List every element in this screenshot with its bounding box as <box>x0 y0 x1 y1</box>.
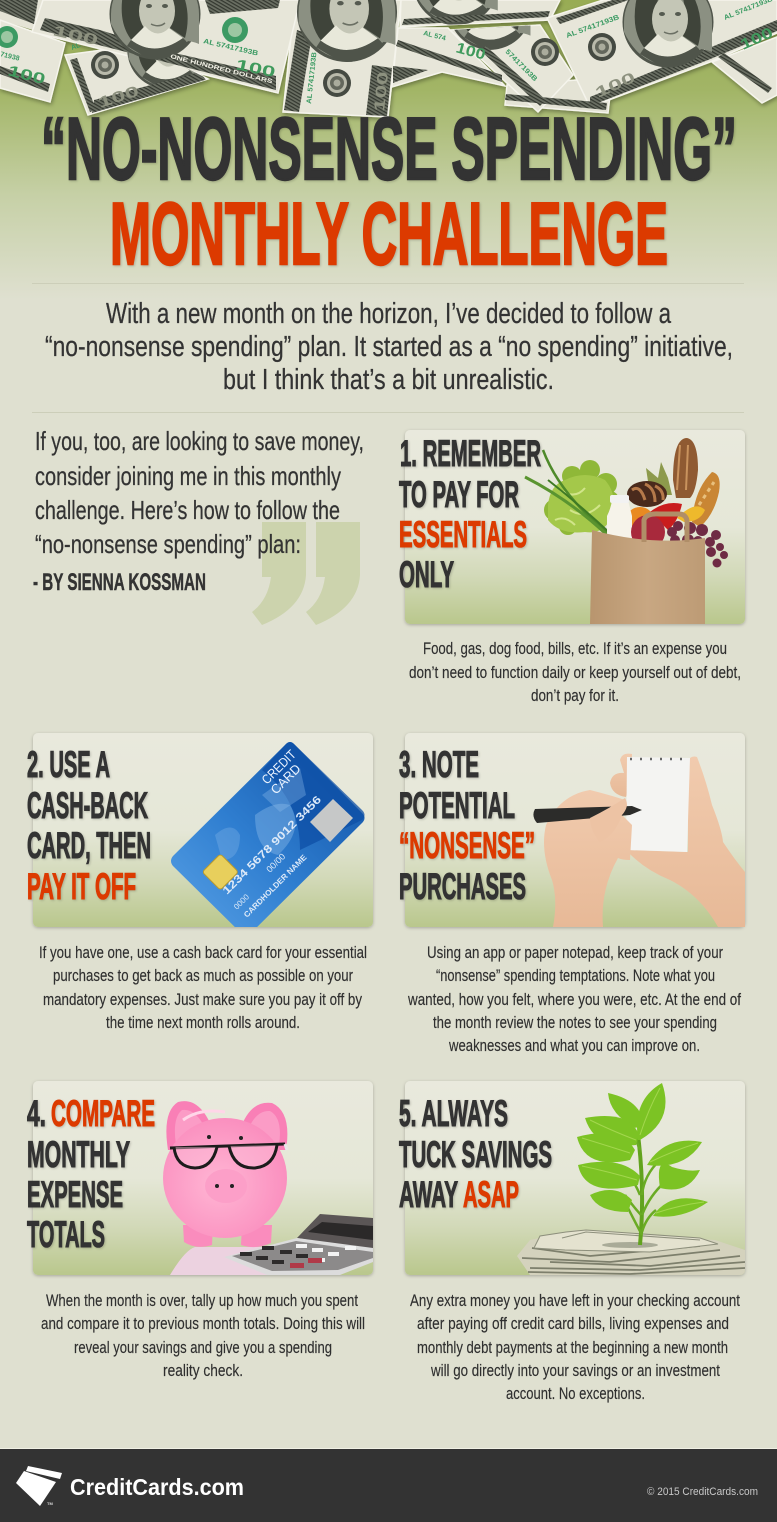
panel 5 heading: AWAY <box>399 1174 458 1215</box>
bill serial and denomination text: 57417193B <box>504 48 538 83</box>
panel 3 description: weaknesses and what you can improve on. <box>448 1036 700 1055</box>
panel 4 heading: EXPENSE <box>27 1174 123 1215</box>
icon: credit card: 1234 5678 9012 3456 <box>221 794 324 897</box>
panel 1 heading: 1. REMEMBER <box>400 433 541 474</box>
logo: CreditCards.com: CreditCards.com <box>70 1474 244 1500</box>
panel 3 heading: POTENTIAL <box>399 785 515 826</box>
panel 2 heading: CARD, THEN <box>27 825 151 866</box>
engraved bands and portraits <box>0 0 777 116</box>
panel 4 description <box>41 1291 365 1380</box>
panel 5 description: account. No exceptions. <box>506 1384 645 1403</box>
panel 2 description: purchases to get back as much as possible on your <box>53 966 353 985</box>
panel 3 description <box>407 943 741 1055</box>
title <box>41 99 737 283</box>
intro paragraph <box>45 298 733 396</box>
bill serial and denomination text <box>0 0 776 112</box>
quote text: “no-nonsense spending” plan: <box>35 529 301 559</box>
icon: plant growing from money <box>517 1083 745 1275</box>
quote text: If you, too, are looking to save money, <box>35 426 364 456</box>
bill serial and denomination text: 100 <box>738 24 776 54</box>
bill serial and denomination text: AL <box>70 42 82 52</box>
panel 2 heading <box>27 744 151 907</box>
icon: credit card <box>171 742 364 938</box>
panel 2 heading: 2. USE A <box>27 744 110 785</box>
panel 4 description: When the month is over, tally up how much you spent <box>46 1291 358 1310</box>
icon: large quotation mark <box>252 522 360 625</box>
icon: hand writing on notepad <box>533 754 745 927</box>
panel 2 description: mandatory expenses. Just make sure you pay it off by <box>43 990 362 1009</box>
bill serial and denomination text: AL 574 <box>423 30 446 42</box>
panel 1 heading: ONLY <box>399 554 454 595</box>
panel 1: essentials <box>399 430 745 624</box>
icon: credit card: CREDIT <box>259 747 299 787</box>
panel 2 description <box>39 943 367 1032</box>
logo: CreditCards.com <box>16 1466 244 1506</box>
panel 2 description: the time next month rolls around. <box>106 1013 300 1032</box>
icon: credit card: 0000 <box>232 892 251 911</box>
panel 4 heading: MONTHLY <box>27 1134 130 1175</box>
panel 5 heading <box>399 1093 552 1215</box>
panel 2 heading: PAY IT OFF <box>27 866 136 907</box>
panel 4 description: and compare it to previous month totals. Doing this will <box>41 1314 365 1333</box>
icon: credit card: CARDHOLDER NAME <box>242 852 309 919</box>
panel 3 heading: 3. NOTE <box>399 744 479 785</box>
panel 3 heading: PURCHASES <box>399 866 526 907</box>
panel 5: tuck savings <box>399 1081 745 1275</box>
panel 4: compare totals <box>27 1081 373 1275</box>
bill serial and denomination text: AL 57417193B <box>203 38 259 58</box>
panel 5 description <box>410 1291 740 1403</box>
panel 5 heading: 5. ALWAYS <box>399 1093 508 1134</box>
panel 5 heading: TUCK SAVINGS <box>399 1134 552 1175</box>
quote text <box>33 426 364 596</box>
panel 4 heading <box>27 1093 155 1255</box>
panel 5 heading: ASAP <box>463 1174 519 1215</box>
panel 1 heading: TO PAY FOR <box>399 474 519 515</box>
bill serial and denomination text: 100 <box>51 22 100 49</box>
bill serial and denomination text: 100 <box>454 39 487 64</box>
panel 3 heading: “NONSENSE” <box>399 825 535 866</box>
quote text: challenge. Here’s how to follow the <box>35 495 340 525</box>
panel 4 heading: TOTALS <box>27 1214 105 1255</box>
bill serial and denomination text: AL 57417193B <box>306 52 318 104</box>
panel 4 heading: 4. <box>27 1093 46 1134</box>
money bills banner <box>0 0 777 117</box>
copyright: © 2015 CreditCards.com <box>647 1486 758 1498</box>
bill serial and denomination text: 100 <box>371 71 392 112</box>
bills far layer <box>0 0 777 117</box>
panel 4 heading: COMPARE <box>51 1093 155 1134</box>
icon: grocery bag <box>525 438 728 624</box>
panel 2 description: If you have one, use a cash back card for your essential <box>39 943 367 962</box>
panel 3 heading <box>399 744 535 907</box>
panel 1 heading <box>399 433 541 595</box>
panel 2 heading: CASH-BACK <box>27 785 148 826</box>
bill serial and denomination text: AL 57417193B <box>565 14 620 40</box>
byline: - BY SIENNA KOSSMAN <box>33 569 206 596</box>
footer <box>0 1448 777 1522</box>
panel 2: cash-back card <box>27 733 373 938</box>
panel 1 description: don’t pay for it. <box>531 686 619 705</box>
panel 4 description: reality check. <box>163 1361 243 1380</box>
bill serial and denomination text: 100 <box>96 83 141 112</box>
bill serial and denomination text: 100 <box>234 56 277 81</box>
bill serial and denomination text: 71938 <box>0 51 20 63</box>
icon: credit card: CARD <box>268 761 304 797</box>
bill serial and denomination text: 100 <box>6 62 47 88</box>
intro paragraph: but I think that’s a bit unrealistic. <box>223 364 554 396</box>
icon: credit card: 00/00 <box>264 851 287 874</box>
panel 4 description: reveal your savings and give you a spending <box>74 1338 332 1357</box>
bill serial and denomination text: 100 <box>593 69 638 102</box>
panel 1 heading: ESSENTIALS <box>399 514 527 555</box>
logo: CreditCards.com: TM <box>47 1501 53 1506</box>
icon: piggy bank with calculator <box>163 1101 373 1275</box>
panel 1 description <box>409 639 741 705</box>
bill serial and denomination text: ONE HUNDRED DOLLARS <box>170 54 273 85</box>
panel 3: nonsense purchases <box>399 733 745 927</box>
quote text: consider joining me in this monthly <box>35 461 341 491</box>
